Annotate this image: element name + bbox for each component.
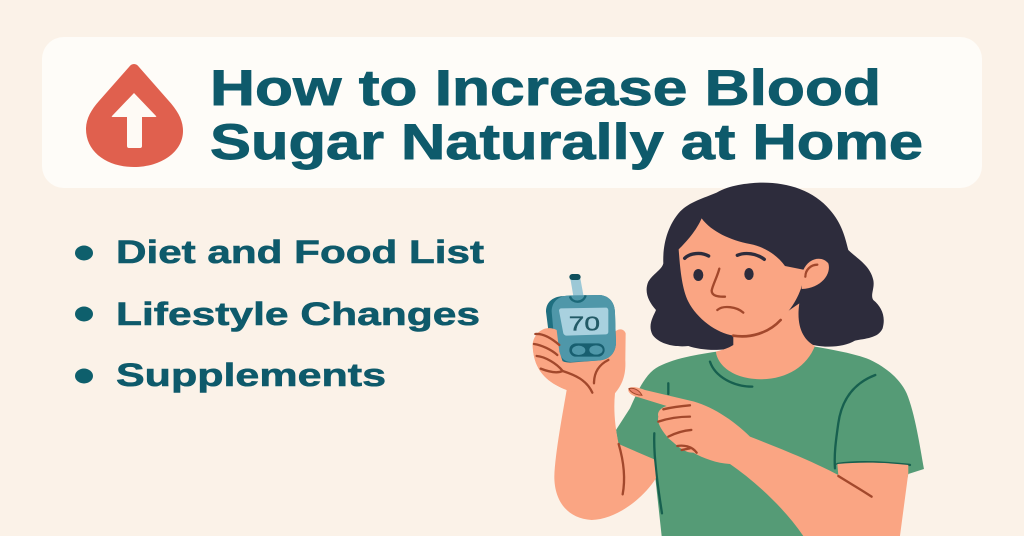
list item: diet and food list: Diet and Food List	[116, 234, 484, 270]
title: How to Increase Blood	[210, 60, 881, 116]
illustration: worried woman with glucose meter	[533, 183, 924, 536]
icon: glucose meter	[546, 274, 616, 363]
title: Sugar Naturally at Home	[210, 114, 923, 170]
shirt seams	[654, 362, 910, 513]
list item: lifestyle changes: Lifestyle Changes	[116, 296, 480, 332]
fingers of holding hand	[533, 328, 608, 393]
bullet list	[75, 234, 484, 393]
finger lines	[658, 405, 872, 497]
icon: blood drop with up arrow	[86, 64, 183, 167]
neck	[716, 303, 815, 379]
title	[210, 60, 923, 170]
left arm and hand holding meter	[533, 328, 656, 520]
panel: title banner	[42, 37, 982, 188]
meter buttons	[569, 343, 605, 357]
right forearm and pointing hand	[628, 387, 908, 536]
meter reading: 70	[569, 312, 600, 335]
meter body	[546, 295, 616, 363]
meter screen	[559, 308, 608, 336]
hair	[647, 183, 884, 350]
face	[679, 218, 805, 336]
list item: lifestyle changes	[75, 296, 480, 332]
list item: supplements	[75, 357, 386, 393]
fingernail	[629, 388, 642, 395]
list item: supplements: Supplements	[116, 357, 386, 393]
test strip	[570, 278, 584, 300]
list item: diet and food list	[75, 234, 484, 270]
arm crease	[619, 444, 624, 494]
shirt	[616, 343, 924, 536]
ear	[802, 259, 829, 289]
facial features	[685, 253, 781, 336]
